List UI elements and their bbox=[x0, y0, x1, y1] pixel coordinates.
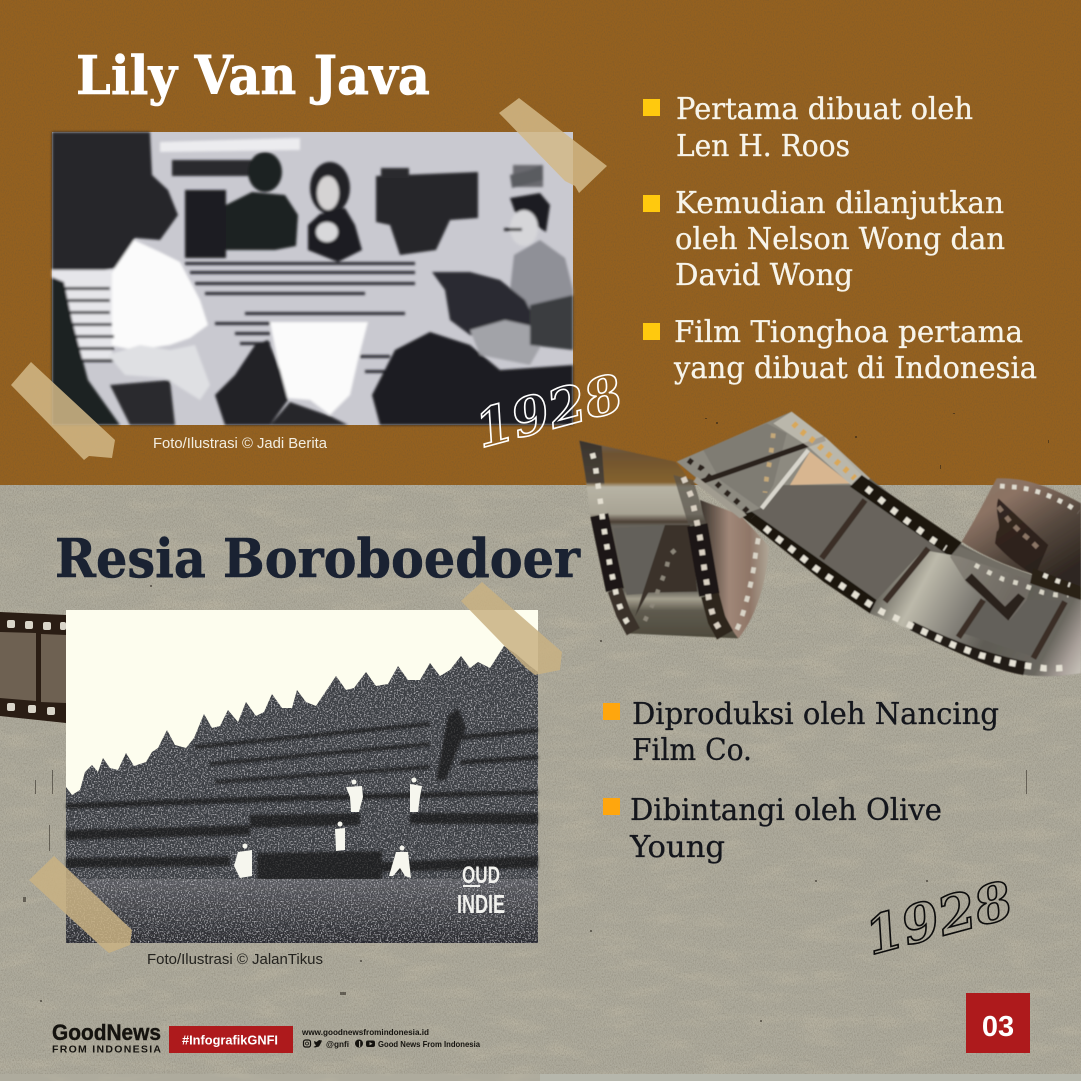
sprocket holes bottom band bbox=[765, 528, 1067, 668]
frame shape in left loop bbox=[613, 525, 665, 595]
caption: photo 2 credit: Foto/Ilustrasi © JalanTikus bbox=[147, 952, 323, 968]
footer contact details: Good News From Indonesia bbox=[378, 1039, 480, 1049]
hashtag badge bbox=[169, 1026, 293, 1053]
film strip fragment at left edge bbox=[0, 612, 66, 723]
temple silhouette bbox=[66, 646, 538, 880]
icon: twitter bbox=[314, 1040, 322, 1048]
watermark: OUD INDIE: OUD bbox=[462, 862, 500, 889]
bottom dark sprocket band bbox=[740, 512, 877, 613]
ribbon bottom dark band bbox=[910, 622, 1027, 675]
bullet list: Resia Boroboedoer: Diproduksi oleh Nancing bbox=[632, 697, 999, 732]
sprocket holes upper section bbox=[793, 423, 855, 478]
main ribbon body bbox=[677, 412, 1081, 676]
woman in dark dress bbox=[226, 152, 298, 250]
footer logo: GoodNews From Indonesia: GoodNews bbox=[52, 1020, 161, 1045]
white cloth centre bbox=[270, 322, 368, 415]
upper-right translucent band bbox=[673, 475, 707, 525]
bullet list: Lily Van Java: Pertama dibuat oleh bbox=[676, 92, 973, 127]
watermark: OUD INDIE bbox=[457, 862, 505, 919]
title: Resia Boroboedoer: Resia Boroboedoer bbox=[55, 528, 581, 590]
year label: 1928 upper: 1928 bbox=[469, 363, 629, 461]
page number badge: 03 bbox=[982, 1011, 1014, 1043]
footer logo: GoodNews From Indonesia: FROM INDONESIA bbox=[52, 1044, 161, 1056]
woman with white face bbox=[308, 162, 362, 262]
bullet list: Lily Van Java: Film Tionghoa pertama bbox=[674, 315, 1023, 350]
dark diagonal bar bbox=[702, 438, 825, 482]
left bench back bbox=[52, 270, 114, 362]
top dark sprocket band bbox=[850, 475, 962, 557]
bullet list: Resia Boroboedoer: Dibintangi oleh Olive bbox=[630, 793, 942, 828]
icon: instagram bbox=[304, 1040, 310, 1047]
footer logo: GoodNews From Indonesia bbox=[52, 1020, 161, 1056]
footer contact details bbox=[301, 1027, 480, 1049]
film strip ribbon bbox=[579, 412, 1081, 676]
bullet list: Resia Boroboedoer: Film Co. bbox=[632, 733, 752, 768]
bullet list: Lily Van Java: David Wong bbox=[675, 258, 853, 293]
tape: top right of photo 2 bbox=[461, 582, 562, 675]
bullet list: Lily Van Java: Kemudian dilanjutkan bbox=[675, 186, 1004, 221]
upper translucent section bbox=[677, 412, 862, 515]
watermark: OUD INDIE: INDIE bbox=[457, 889, 505, 919]
bullet list: Lily Van Java: Len H. Roos bbox=[676, 129, 850, 164]
back panel of left loop bbox=[700, 500, 769, 638]
bullet list: Resia Boroboedoer: Young bbox=[629, 830, 725, 865]
dark tree and seated man's hair bbox=[52, 132, 178, 280]
bullet list: Lily Van Java bbox=[643, 92, 1037, 386]
icon: youtube bbox=[366, 1040, 375, 1047]
bench slats centre bbox=[185, 262, 415, 373]
bullet list: Lily Van Java: oleh Nelson Wong dan bbox=[675, 222, 1005, 257]
tape: top right of photo 1 bbox=[499, 98, 607, 193]
dark lower left bbox=[52, 277, 120, 425]
white shirt of seated man bbox=[108, 240, 208, 350]
dark centre-bottom figures bbox=[215, 340, 288, 425]
title: Lily Van Java: Lily Van Java bbox=[76, 45, 430, 107]
lower ribbon section bbox=[870, 550, 1081, 676]
pale highlight bar bbox=[762, 450, 808, 508]
sprocket holes of back panel bbox=[737, 538, 758, 630]
outer band of right loop bbox=[1030, 568, 1081, 600]
light edge band bbox=[773, 412, 870, 490]
icon: facebook bbox=[355, 1040, 363, 1048]
background: grey lower panel bbox=[0, 485, 1081, 1081]
footer contact details: www.goodnewsfromindonesia.id bbox=[301, 1027, 429, 1037]
photo: Lily Van Java film still bbox=[52, 132, 573, 425]
right loop bbox=[962, 478, 1081, 587]
right window with plants bbox=[376, 172, 478, 255]
caption: photo 1 credit: Foto/Ilustrasi © Jadi Berita bbox=[153, 436, 328, 452]
left sprocket band bbox=[599, 515, 615, 590]
upper-left band bbox=[579, 441, 607, 513]
hook strip in front of ribbon bbox=[950, 547, 1033, 620]
tape: bottom left of photo 1 bbox=[11, 362, 115, 460]
year label: 1928 lower: 1928 bbox=[859, 870, 1019, 968]
photo: Borobudur temple bbox=[66, 610, 538, 943]
tape: bottom left of photo 2 bbox=[29, 856, 132, 953]
bullet list: Lily Van Java: yang dibuat di Indonesia bbox=[673, 351, 1037, 386]
footer contact details: @gnfi bbox=[326, 1039, 349, 1049]
doorway and window bbox=[172, 160, 252, 176]
hashtag badge: #InfografikGNFI bbox=[182, 1032, 278, 1048]
right loop sprocket holes bbox=[1000, 486, 1079, 512]
bullet list: Resia Boroboedoer bbox=[603, 697, 999, 865]
temple terrace shadows bbox=[66, 708, 538, 880]
frame separators bbox=[822, 500, 1065, 658]
inner dark band of right loop bbox=[995, 498, 1048, 576]
right decoration top bbox=[510, 165, 543, 188]
man with fez bbox=[432, 165, 573, 365]
page number badge bbox=[966, 993, 1030, 1053]
front panel of left loop bbox=[579, 441, 738, 638]
grass bbox=[66, 879, 538, 943]
sprocket holes top band bbox=[867, 488, 946, 548]
background: brown upper panel bbox=[0, 0, 1081, 486]
left sprocket holes bbox=[592, 453, 632, 628]
figures in white bbox=[234, 778, 422, 878]
